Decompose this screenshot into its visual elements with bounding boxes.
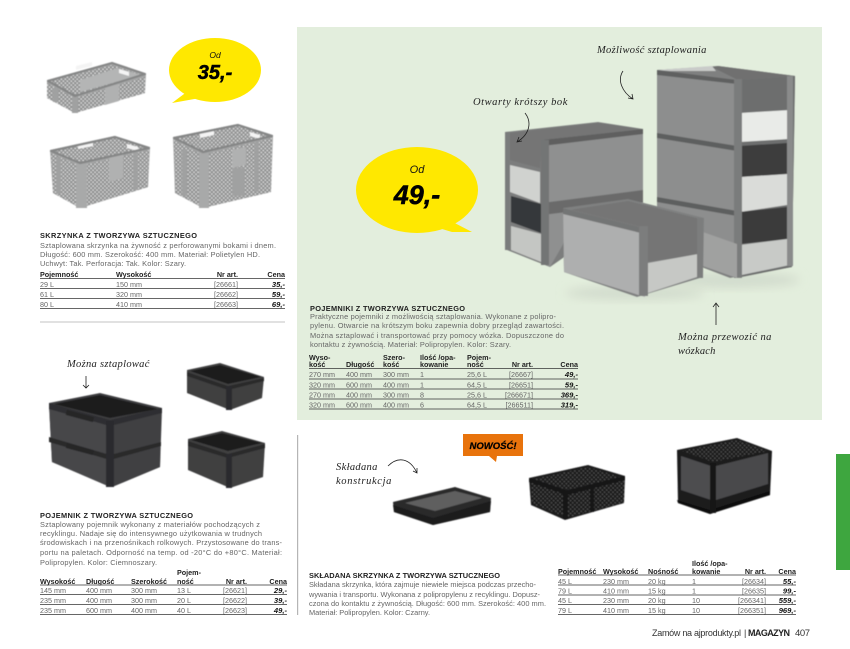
table: folding crate prices: 15 kg — [648, 586, 666, 596]
text: crate heading and description: Uchwyt: Tak. Perforacja: Tak. Kolor: Szary. — [40, 259, 186, 268]
panel: green background — [297, 27, 822, 420]
table: dark container prices: Wysokość — [40, 577, 75, 586]
table: dark container prices: 300 mm — [131, 586, 157, 595]
table: folding crate prices: 20 kg — [648, 577, 666, 586]
table: crate prices: 150 mm — [116, 280, 142, 289]
text: crate heading and description: Długość: 600 mm. Szerokość: 400 mm. Materiał: Polietylen HD. — [40, 250, 260, 259]
table: folding crate prices: 230 mm — [603, 577, 629, 586]
table: container prices: 8 — [420, 390, 424, 400]
table: container prices: 1 — [420, 370, 424, 379]
table: folding crate prices: 79 L — [558, 606, 572, 615]
table: folding crate prices: Ilość /opa- — [692, 559, 728, 568]
table: folding crate prices: 15 kg — [648, 606, 666, 615]
text: dark container heading and description — [40, 511, 283, 567]
table: dark container prices: 300 mm — [131, 596, 157, 605]
table: container prices: Cena — [560, 360, 579, 369]
text: crate heading and description: SKRZYNKA Z TWORZYWA SZTUCZNEGO — [40, 231, 197, 240]
table: container prices: 270 mm — [309, 390, 335, 400]
table: container prices: 369,- — [561, 390, 578, 400]
image: open black crate — [529, 465, 625, 520]
table: container prices: 600 mm — [346, 380, 372, 390]
text: container heading and description: pylenu. Otwarcie na krótszym boku zapewnia dobry przegląd zawartości. — [310, 321, 564, 330]
table: container prices: [26651] — [509, 380, 533, 390]
table: folding crate prices: 45 L — [558, 577, 572, 586]
table: container prices: Szero- — [383, 353, 406, 362]
text: container heading and description: POJEMNIKI Z TWORZYWA SZTUCZNEGO — [310, 304, 465, 313]
table: container prices: kowanie — [420, 360, 448, 369]
table: crate prices: 29 L — [40, 280, 54, 289]
table: dark container prices: 400 mm — [86, 596, 112, 605]
table: folding crate prices: [266351] — [738, 606, 766, 615]
table: crate prices — [40, 270, 286, 322]
table: container prices: [266671] — [505, 390, 533, 400]
table: folding crate prices: Pojemność — [558, 567, 596, 576]
table: dark container prices: Szerokość — [131, 577, 167, 586]
annotation: open short side: Otwarty krótszy bok — [473, 97, 568, 108]
callout: price bubble 49: Od — [410, 164, 425, 176]
table: container prices: 319,- — [561, 400, 578, 410]
table: crate prices: 59,- — [272, 290, 285, 299]
table: crate prices: [26663] — [214, 300, 238, 309]
table: dark container prices: [26621] — [223, 586, 247, 595]
table: folding crate prices: 1 — [692, 577, 696, 586]
table: folding crate prices: 45 L — [558, 596, 572, 605]
table: container prices: Długość — [346, 360, 374, 369]
text: container heading and description: Praktyczne pojemniki z możliwością sztaplowania. Wykonane z polipro- — [310, 312, 557, 321]
table: folding crate prices: Cena — [778, 567, 797, 576]
table: crate prices: 410 mm — [116, 300, 142, 309]
table: folding crate prices: [266341] — [738, 596, 766, 605]
annotation: folding construction: Składana — [336, 462, 378, 473]
table: folding crate prices: 10 — [692, 596, 700, 605]
image: folded crate — [393, 487, 491, 525]
table: folding crate prices: 410 mm — [603, 586, 629, 596]
table: dark container prices: 145 mm — [40, 586, 66, 595]
text: folding crate heading and description — [308, 571, 546, 617]
badge: new — [463, 434, 523, 462]
table: folding crate prices: kowanie — [692, 567, 720, 576]
table: container prices: [26667] — [509, 370, 533, 379]
table: folding crate prices: 10 — [692, 606, 700, 615]
image: stacked grey containers right — [657, 66, 800, 288]
image: small perforated crate — [47, 62, 146, 113]
table: container prices: 49,- — [564, 370, 578, 379]
table: container prices: kość — [309, 360, 325, 369]
table: dark container prices: [26623] — [223, 606, 247, 615]
table: dark container prices: 29,- — [273, 586, 287, 595]
table: container prices: Pojem- — [467, 353, 492, 362]
table: container prices: 400 mm — [383, 400, 409, 410]
table: crate prices: Pojemność — [40, 270, 78, 279]
table: folding crate prices: [26634] — [742, 577, 766, 586]
image: tall black crate — [677, 438, 772, 514]
table: crate prices: [26661] — [214, 280, 238, 289]
text: folding crate heading and description: Składana skrzynka, która zajmuje niewiele miejsca podczas przecho- — [309, 580, 537, 589]
image: tall perforated crate — [173, 124, 273, 208]
image: stacked grey containers left — [505, 122, 643, 267]
table: crate prices: 320 mm — [116, 290, 142, 299]
table: container prices: 25,6 L — [467, 390, 487, 400]
table: dark container prices: 39,- — [274, 596, 287, 605]
table: container prices: 270 mm — [309, 370, 335, 379]
text: folding crate heading and description: Materiał: Polipropylen. Kolor: Czarny. — [309, 608, 430, 617]
badge: new: NOWOŚĆ! — [470, 440, 516, 452]
vertical divider line — [297, 435, 298, 615]
table: dark container prices: Długość — [86, 577, 114, 586]
text: folding crate heading and description: SKŁADANA SKRZYNKA Z TWORZYWA SZTUCZNEGO — [309, 571, 500, 580]
annotation: trolley: Można przewozić na — [677, 332, 772, 343]
table: folding crate prices: 559,- — [779, 596, 796, 605]
table: container prices — [309, 353, 579, 410]
image: dark container top right — [187, 363, 264, 410]
annotation: stacking — [596, 45, 707, 99]
table: crate prices: Wysokość — [116, 270, 151, 279]
footer: order line and page number: Zamów na ajprodukty.pl — [652, 628, 741, 638]
table: crate prices: 80 L — [40, 300, 54, 309]
table: crate prices: Nr art. — [217, 270, 238, 279]
table: dark container prices: Cena — [269, 577, 288, 586]
table: crate prices: 35,- — [272, 280, 285, 289]
image: dark container bottom right — [188, 431, 265, 488]
table: crate prices: [26662] — [214, 290, 238, 299]
callout: price bubble 35: Od — [209, 50, 221, 60]
table: folding crate prices: 55,- — [783, 577, 796, 586]
table: dark container prices: 400 mm — [86, 586, 112, 595]
text: dark container heading and description: Polipropylen. Kolor: Ciemnoszary. — [40, 558, 157, 567]
table: container prices: 300 mm — [383, 370, 409, 379]
table: dark container prices: 235 mm — [40, 596, 66, 605]
table: folding crate prices: Nr art. — [745, 567, 766, 576]
table: dark container prices: 40 L — [177, 606, 191, 615]
table: folding crate prices: [26635] — [742, 586, 766, 596]
image: front grey container — [563, 199, 705, 300]
footer: order line and page number: MAGAZYN — [748, 628, 790, 638]
table: container prices: 600 mm — [346, 400, 372, 410]
callout: price bubble 49: 49,- — [393, 180, 440, 210]
annotation: can be stacked — [66, 359, 150, 388]
table: folding crate prices: 1 — [692, 586, 696, 596]
callout: price bubble 35: 35,- — [198, 62, 233, 84]
footer: order line and page number: | — [744, 628, 746, 638]
table: folding crate prices: 20 kg — [648, 596, 666, 605]
text: dark container heading and description: Sztaplowany pojemnik wykonany z materiałów pochodzących z — [40, 520, 260, 529]
table: dark container prices: 600 mm — [86, 606, 112, 615]
annotation: trolley: wózkach — [678, 346, 716, 357]
annotation: folding construction — [336, 460, 417, 487]
table: container prices: Nr art. — [512, 360, 533, 369]
callout: price bubble 35 — [169, 38, 261, 103]
table: dark container prices: 400 mm — [131, 606, 157, 615]
annotation: stacking: Możliwość sztaplowania — [596, 45, 707, 56]
table: container prices: 400 mm — [383, 380, 409, 390]
table: folding crate prices: 410 mm — [603, 606, 629, 615]
table: container prices: Wyso- — [309, 353, 331, 362]
table: folding crate prices: Nośność — [648, 567, 678, 576]
table: crate prices: Cena — [267, 270, 286, 279]
footer: order line and page number — [652, 628, 810, 639]
text: dark container heading and description: recyklingu. Nadaje się do intensywnego użytkowania w trudnych — [40, 529, 262, 538]
callout: price bubble 49 — [356, 147, 478, 233]
table: container prices: 64,5 L — [467, 380, 487, 390]
table: dark container prices: [26622] — [223, 596, 247, 605]
text: dark container heading and description: portu na paletach. Odporność na temp. od -20°C do +80°C. Materiał: — [40, 548, 282, 557]
table: dark container prices: Pojem- — [177, 568, 202, 577]
text: container heading and description: kontaktu z żywnością. Materiał: Polipropylen. Kolor: Szary. — [310, 340, 511, 349]
image: medium perforated crate — [50, 136, 150, 208]
green side tab — [836, 454, 850, 570]
table: crate prices: 69,- — [272, 300, 285, 309]
table: dark container prices: 235 mm — [40, 606, 66, 615]
footer: order line and page number: 407 — [795, 628, 810, 639]
table: folding crate prices: Wysokość — [603, 567, 638, 576]
table: folding crate prices: 230 mm — [603, 596, 629, 605]
table: folding crate prices: 79 L — [558, 586, 572, 596]
table: container prices: 25,6 L — [467, 370, 487, 379]
annotation: can be stacked: Można sztaplować — [66, 359, 150, 370]
table: container prices: ność — [467, 360, 484, 369]
text: crate heading and description: Sztaplowana skrzynka na żywność z perforowanymi bokami i dnem. — [40, 241, 276, 250]
table: dark container prices: Nr art. — [226, 577, 247, 586]
text: container heading and description: Można sztaplować i transportować przy pomocy wózka. Dopuszczone do — [310, 331, 564, 340]
table: folding crate prices — [558, 559, 797, 615]
table: container prices: 300 mm — [383, 390, 409, 400]
table: container prices: 6 — [420, 400, 424, 410]
text: folding crate heading and description: czona do kontaktu z żywnością. Długość: 600 mm. Szerokość: 400 mm. — [309, 599, 546, 608]
table: container prices: 320 mm — [309, 400, 335, 410]
image: stacked dark containers — [49, 393, 162, 487]
table: container prices: kość — [383, 360, 399, 369]
table: container prices: 320 mm — [309, 380, 335, 390]
annotation: folding construction: konstrukcja — [336, 476, 392, 487]
text: dark container heading and description: POJEMNIK Z TWORZYWA SZTUCZNEGO — [40, 511, 193, 520]
table: dark container prices: ność — [177, 577, 194, 586]
table: dark container prices: 13 L — [177, 586, 191, 595]
annotation: trolley — [677, 303, 772, 357]
table: dark container prices: 49,- — [273, 606, 287, 615]
text: folding crate heading and description: wywania i transportu. Wykonana z polipropylenu z recyklingu. Dopusz- — [308, 590, 541, 599]
table: container prices: 400 mm — [346, 390, 372, 400]
table: dark container prices — [40, 568, 288, 615]
text: container heading and description — [310, 304, 564, 349]
table: dark container prices: 20 L — [177, 596, 191, 605]
table: crate prices: 61 L — [40, 290, 54, 299]
table: container prices: Ilość /opa- — [420, 353, 456, 362]
text: crate heading and description — [40, 231, 276, 268]
table: container prices: [266511] — [506, 400, 533, 410]
table: container prices: 1 — [420, 380, 424, 390]
text: dark container heading and description: środowiskach i na przenośnikach rolkowych. Przystosowane do trans- — [40, 538, 283, 547]
table: folding crate prices: 99,- — [783, 586, 796, 596]
table: container prices: 64,5 L — [467, 400, 487, 410]
table: folding crate prices: 969,- — [779, 606, 796, 615]
table: container prices: 59,- — [565, 380, 578, 390]
table: container prices: 400 mm — [346, 370, 372, 379]
annotation: open short side — [473, 97, 568, 142]
